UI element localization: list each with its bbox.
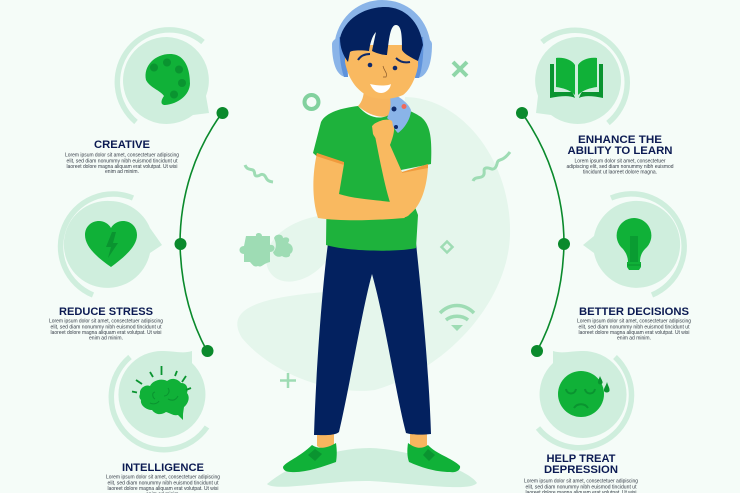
text: better decisions body: elit, sed diam nonummy nibh euismod tincidunt ut [578, 324, 690, 330]
icon: palette [146, 54, 190, 105]
text: depression body: elit, sed diam nonummy nibh euismod tincidunt ut [526, 484, 637, 490]
neck [358, 88, 396, 117]
text: reduce stress body: laoreet dolore magna aliquam erat volutpat. Ut wisi [50, 330, 162, 336]
text: reduce stress body [49, 319, 163, 341]
ground shadow [267, 448, 477, 487]
panel: intelligence [106, 351, 220, 493]
panel: enhance the ability to learn [535, 30, 674, 176]
icon: wifi [440, 306, 474, 331]
icon: plus [280, 373, 296, 388]
decorative icons [240, 62, 510, 388]
text: creative body: laoreet dolore magna aliquam erat volutpat. Ut wisi [66, 164, 178, 170]
background blob [237, 97, 510, 391]
icon: diamond [442, 242, 452, 252]
arm: right [373, 121, 428, 217]
text: better decisions body: enim ad minim. [617, 335, 651, 341]
text: better decisions body [577, 319, 691, 341]
text: creative body [65, 153, 179, 175]
heading: intelligence: INTELLIGENCE [122, 462, 204, 474]
heading: help treat depression: DEPRESSION [544, 464, 618, 476]
icon: left squiggle [245, 165, 273, 182]
eyes and nose [358, 54, 410, 77]
game controller [387, 92, 411, 133]
text: enhance body [566, 159, 674, 176]
text: better decisions body: laoreet dolore magna aliquam erat volutpat. Ut wisi [578, 330, 690, 336]
heading: help treat depression: HELP TREAT [546, 453, 616, 465]
text: reduce stress body: elit, sed diam nonummy nibh euismod tincidunt ut [50, 324, 162, 330]
text: intelligence body: laoreet dolore magna aliquam erat volutpat. Ut wisi [108, 486, 218, 492]
pants [314, 243, 431, 435]
heading: creative: CREATIVE [94, 139, 150, 151]
text: enhance body: tincidunt ut laoreet dolore magna. [583, 170, 657, 176]
text: intelligence body: elit, sed diam nonummy nibh euismod tincidunt ut [108, 481, 219, 487]
heading: help treat depression [544, 453, 618, 476]
icon: sad face [558, 371, 610, 417]
text: intelligence body [106, 475, 220, 493]
icon: puzzle pieces [240, 233, 293, 267]
smile [370, 84, 391, 93]
panel: creative [65, 30, 209, 175]
text: creative body: Lorem ipsum dolor sit amet, consectetuer adipiscing [65, 153, 179, 159]
icon: brain [132, 366, 191, 420]
connector: right [516, 107, 570, 357]
text: enhance body: Lorem ipsum dolor sit amet, consectetuer [574, 159, 666, 165]
heading: enhance the ability to learn: ENHANCE THE [578, 134, 662, 146]
connector: left [174, 107, 228, 357]
shirt [313, 106, 431, 251]
headphone band [335, 0, 430, 40]
headphone cups [332, 37, 432, 78]
heading: reduce stress: REDUCE STRESS [59, 306, 153, 318]
text: depression body [524, 479, 638, 493]
panel: help treat depression [524, 351, 638, 493]
face [345, 45, 418, 99]
text: creative body: elit, sed diam nonummy nibh euismod tincidunt ut [66, 158, 178, 164]
text: depression body: Lorem ipsum dolor sit amet, consectetuer adipiscing [524, 479, 638, 485]
character: gamer boy [283, 0, 460, 472]
arm: left [313, 153, 405, 220]
heading: better decisions: BETTER DECISIONS [579, 306, 689, 318]
text: enhance body: adipiscing elit, sed diam nonummy nibh euismod [566, 164, 674, 170]
icon: right squiggle [473, 152, 510, 181]
hand [372, 120, 393, 144]
text: better decisions body: Lorem ipsum dolor sit amet, consectetuer adipiscing [577, 319, 691, 325]
icon: light bulb [617, 218, 651, 270]
icon: ring [304, 95, 318, 109]
shoes [283, 443, 460, 472]
icon: cross [453, 62, 467, 76]
icon: broken heart [85, 221, 137, 267]
panel: better decisions [577, 194, 691, 341]
text: creative body: enim ad minim. [105, 169, 139, 175]
ankles [317, 433, 427, 449]
heading: enhance the ability to learn [568, 134, 673, 157]
text: reduce stress body: enim ad minim. [89, 335, 123, 341]
text: reduce stress body: Lorem ipsum dolor sit amet, consectetuer adipiscing [49, 319, 163, 325]
hair [340, 7, 423, 62]
heading: enhance the ability to learn: ABILITY TO LEARN [568, 145, 673, 157]
panel: reduce stress [49, 194, 163, 341]
icon: open book [550, 58, 603, 98]
text: intelligence body: Lorem ipsum dolor sit amet, consectetuer adipiscing [106, 475, 220, 481]
